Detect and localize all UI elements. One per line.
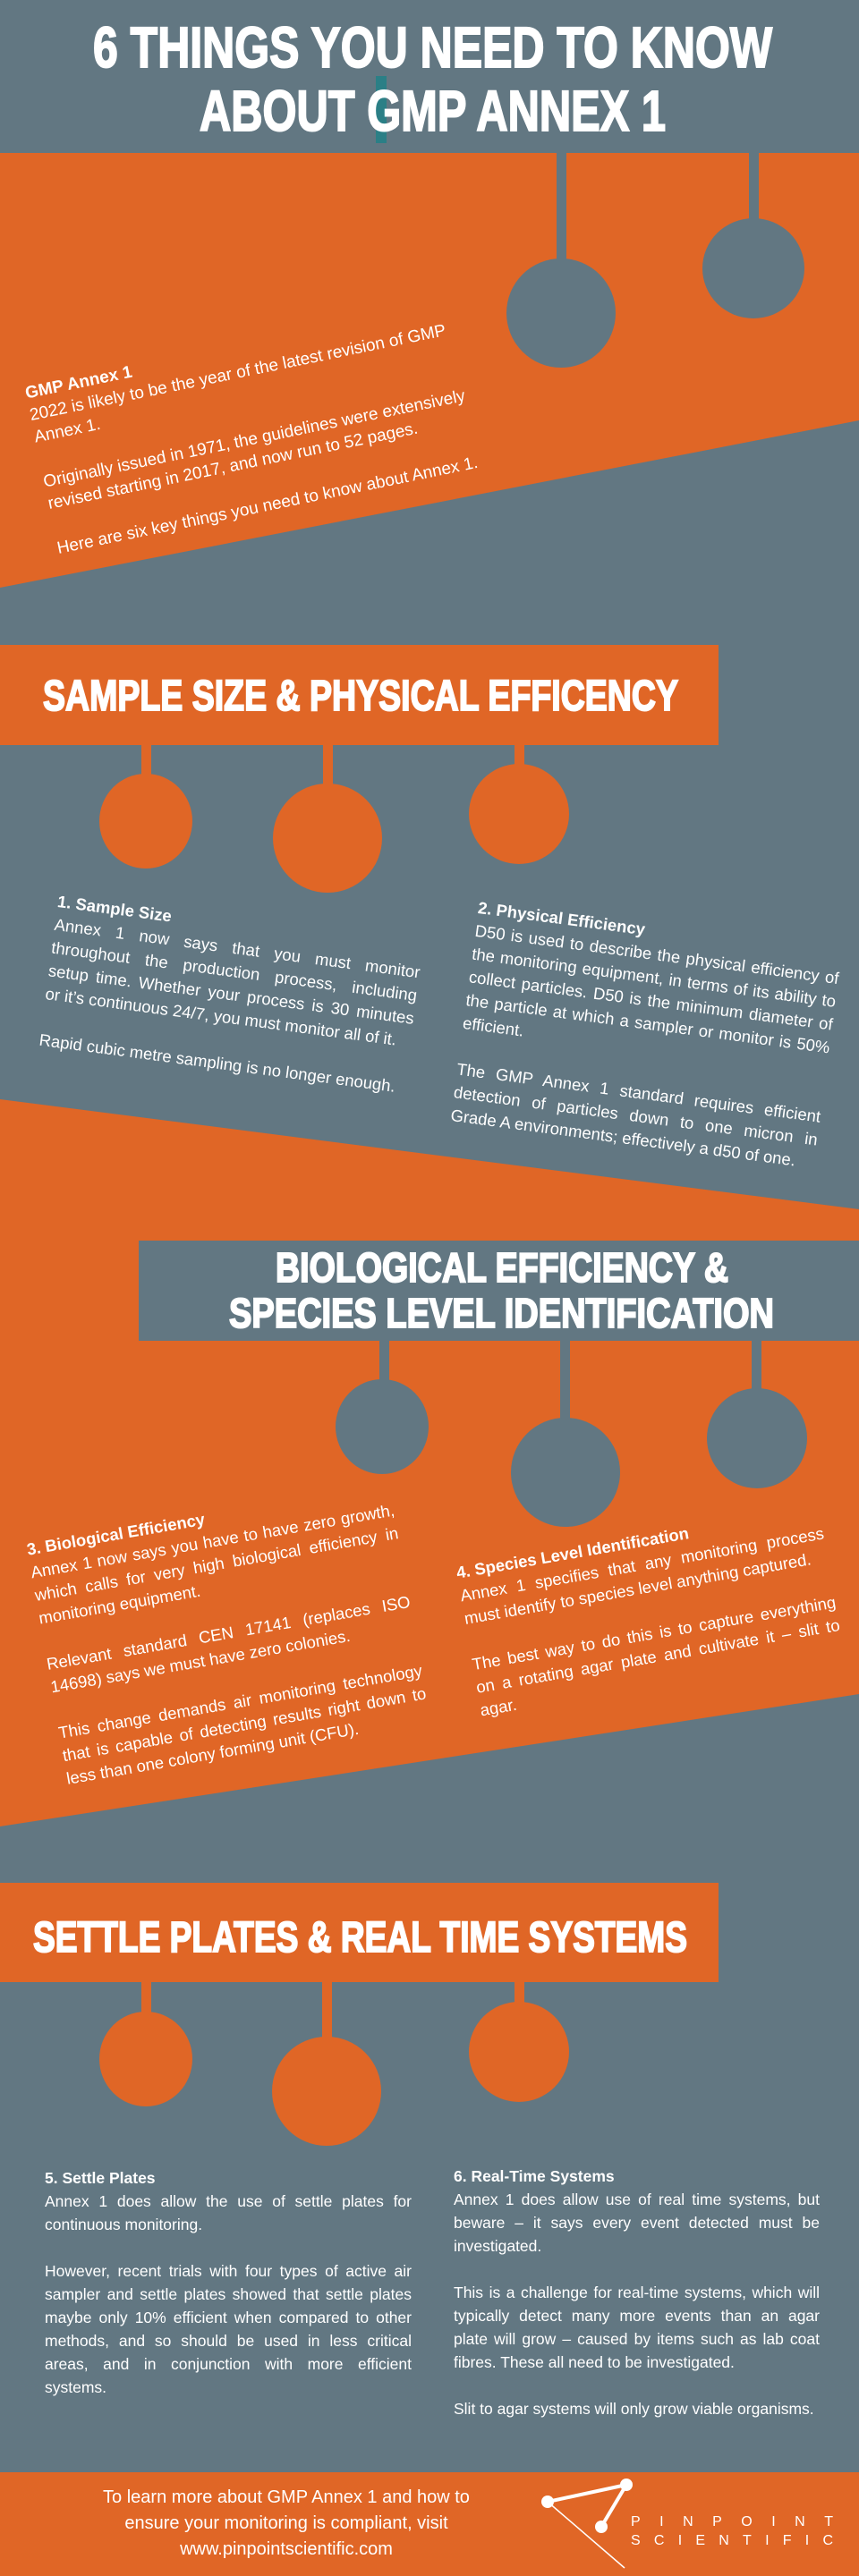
heading: biological efficiency & species level identification <box>139 1241 859 1341</box>
text: 6. Real-Time Systems: Annex 1 does allow use of real time systems, but beware – it says every event detected must be investigated. <box>454 2190 820 2255</box>
text: 4. Species Level Identification: Annex 1 specifies that any monitoring process must identify to species level anything captured. <box>459 1523 825 1628</box>
text: 5. Settle Plates: However, recent trials with four types of active air sampler and settle plates showed that settle plates maybe only 10% efficient when compared to other methods, and so should be used in less critical areas, and in conjunction with more efficient systems. <box>45 2262 412 2396</box>
text: 3. Biological Efficiency: 3. Biological Efficiency <box>25 1510 206 1559</box>
text: 1. Sample Size: Annex 1 now says that you must monitor throughout the production process, including setup time. Whether your process is 30 minutes or it’s continuous 24/7, you must monitor all of it. <box>44 915 421 1049</box>
text: 4. Species Level Identification <box>455 1523 841 1719</box>
text: 2. Physical Efficiency: 2. Physical Efficiency <box>477 898 646 938</box>
intro text: 2022 is likely to be the year of the latest revision of GMP <box>28 321 447 425</box>
text: 2. Physical Efficiency <box>449 898 840 1169</box>
footer call to action: ensure your monitoring is compliant, visit <box>124 2513 448 2533</box>
text: 2. Physical Efficiency: The GMP Annex 1 standard requires efficient detection of particles down to one micron in Grade A environments; effectively a d50 of one. <box>449 1059 821 1169</box>
intro text: Annex 1. <box>32 415 102 447</box>
intro text: Originally issued in 1971, the guidelines were extensively <box>42 386 467 491</box>
intro text: Here are six key things you need to know about Annex 1. <box>55 453 480 558</box>
logo: pinpoint scientific: PINPOINT <box>631 2514 833 2529</box>
intro text: revised starting in 2017, and now run to 52 pages. <box>47 419 420 513</box>
text: 6. Real-Time Systems <box>454 2167 820 2418</box>
footer call to action: To learn more about GMP Annex 1 and how to <box>103 2487 470 2507</box>
title <box>93 15 773 143</box>
pendants section 1 <box>99 745 569 893</box>
hero pendants <box>506 153 804 368</box>
text: 3. Biological Efficiency: Relevant standard CEN 17141 (replaces ISO 14698) says we must have zero colonies. <box>45 1592 412 1696</box>
text: 1. Sample Size: 1. Sample Size <box>56 892 173 926</box>
text: 6. Real-Time Systems: This is a challenge for real-time systems, which will typically detect many more events than an agar plate will grow – caused by items such as lab coat fibres. These all need to be investigated. <box>454 2284 820 2371</box>
heading: biological efficiency & species level identification: BIOLOGICAL EFFICIENCY & <box>276 1244 728 1291</box>
text: 1. Sample Size: Rapid cubic metre sampling is no longer enough. <box>38 1030 396 1096</box>
text: 4. Species Level Identification: 4. Species Level Identification <box>455 1523 690 1582</box>
logo: pinpoint scientific <box>541 2479 833 2569</box>
text: 4. Species Level Identification: The best way to do this is to capture everything on a rotating agar plate and cultivate it – slit to agar. <box>471 1592 841 1719</box>
text: 6. Real-Time Systems: 6. Real-Time Systems <box>454 2167 615 2185</box>
text: 1. Sample Size <box>38 892 421 1096</box>
text: 5. Settle Plates <box>45 2169 412 2396</box>
text: 3. Biological Efficiency: Annex 1 now says you have to have zero growth, which calls for very high biological efficiency in monitoring equipment. <box>30 1500 400 1628</box>
pendants section 2 <box>336 1341 807 1527</box>
pendants section 3 <box>99 1982 569 2146</box>
intro text: GMP Annex 1 <box>23 363 134 403</box>
text: 5. Settle Plates: Annex 1 does allow the use of settle plates for continuous monitoring. <box>45 2192 412 2233</box>
text: 3. Biological Efficiency: This change demands air monitoring technology that is capable of detecting results right down to less than one colony forming unit (CFU). <box>57 1661 428 1788</box>
footer call to action: www.pinpointscientific.com <box>180 2539 393 2559</box>
text: 2. Physical Efficiency: D50 is used to describe the physical efficiency of the monitoring equipment, in terms of its ability to collect particles. D50 is the minimum diameter of the particle at which a sampler or monitor is 50% efficient. <box>462 921 840 1056</box>
footer call to action <box>103 2487 470 2559</box>
logo: pinpoint scientific: SCIENTIFIC <box>631 2533 833 2548</box>
text: 3. Biological Efficiency <box>25 1500 428 1788</box>
heading: sample size & physical efficiency <box>0 645 719 745</box>
title: ABOUT GMP ANNEX 1 <box>200 79 666 143</box>
text: 6. Real-Time Systems: Slit to agar systems will only grow viable organisms. <box>454 2400 814 2418</box>
intro text <box>23 321 480 558</box>
text: 5. Settle Plates: 5. Settle Plates <box>45 2169 156 2187</box>
heading: settle plates & real time systems <box>0 1883 719 1982</box>
